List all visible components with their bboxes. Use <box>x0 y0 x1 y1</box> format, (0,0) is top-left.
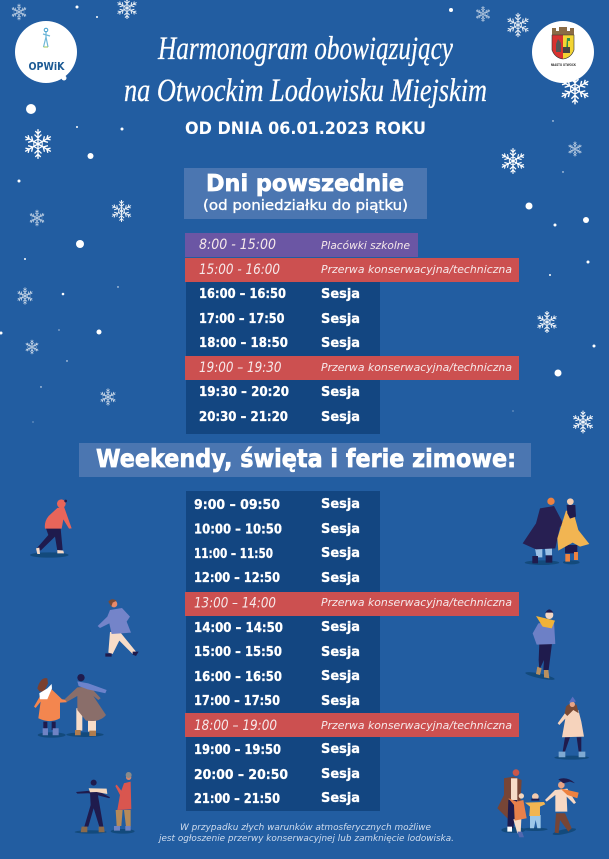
footnote <box>158 822 454 844</box>
row: session 11:00 <box>194 546 360 562</box>
logo: Miasto Otwock: MIASTO OTWOCK <box>551 62 576 67</box>
row: session 17:00: Sesja <box>321 312 360 327</box>
row: session 11:00: 11:00 – 11:50 <box>194 547 273 562</box>
row: session 19:00: Sesja <box>321 742 360 757</box>
couple holding hands <box>34 674 107 738</box>
row: session 11:00: Sesja <box>321 546 360 561</box>
footnote: jest ogłoszenie przerwy konserwacyjnej lub zamknięcie lodowiska. <box>158 834 454 844</box>
row: session 16:00 <box>194 669 360 685</box>
illustrations: right skaters <box>497 498 589 837</box>
skater in blue jacket <box>98 599 139 657</box>
row: session 16:00: 16:00 – 16:50 <box>194 670 282 685</box>
weekend schedule <box>185 491 519 811</box>
row: session 20:30 <box>199 410 360 425</box>
row: session 20:30: Sesja <box>321 410 360 425</box>
weekday schedule <box>185 233 519 434</box>
logo: Miasto Otwock <box>532 21 594 83</box>
heading: weekdays <box>184 168 427 219</box>
row: break 15:00 <box>185 258 519 282</box>
row: session 20:00 <box>194 767 360 783</box>
row: session 10:00: Sesja <box>321 522 360 537</box>
logo: OPWiK: OPWiK <box>28 61 65 73</box>
row: break 19:00: Przerwa konserwacyjna/techniczna <box>321 362 512 374</box>
row: break 18:00: 18:00 – 19:00 <box>194 718 277 734</box>
row: session 21:00: Sesja <box>321 791 360 806</box>
row: session 12:00: Sesja <box>321 571 360 586</box>
row: session 15:00 <box>194 645 360 660</box>
row: break 13:00: 13:00 – 14:00 <box>194 596 276 612</box>
row: session 18:00: 18:00 – 18:50 <box>199 336 288 351</box>
row: break 15:00: Przerwa konserwacyjna/techniczna <box>321 264 512 276</box>
row: break 18:00 <box>185 713 519 737</box>
row: school hours: Placówki szkolne <box>321 240 410 252</box>
heading: weekdays: Dni powszednie <box>206 169 404 197</box>
row: session 9:00: 9:00 – 09:50 <box>194 498 280 513</box>
skater in red hoodie <box>30 499 72 558</box>
row: session 16:00 <box>199 287 360 302</box>
row: session 9:00: Sesja <box>321 497 360 512</box>
row: school hours <box>185 233 418 257</box>
family of skaters <box>497 769 579 837</box>
row: session 17:00: Sesja <box>321 694 360 709</box>
row: break 18:00: Przerwa konserwacyjna/techniczna <box>321 720 512 732</box>
row: break 15:00: 15:00 - 16:00 <box>199 262 280 278</box>
panel: weekend sessions background <box>186 491 380 811</box>
skater with yellow scarf <box>525 609 555 681</box>
row: break 13:00: Przerwa konserwacyjna/techniczna <box>321 597 512 609</box>
row: session 19:30: Sesja <box>321 385 360 400</box>
row: session 14:00: Sesja <box>321 620 360 635</box>
row: session 17:00 <box>194 694 360 709</box>
row: session 19:00 <box>194 742 360 758</box>
title: Harmonogram obowiązujący <box>157 31 453 67</box>
row: session 16:00: 16:00 – 16:50 <box>199 287 286 302</box>
row: session 12:00: 12:00 – 12:50 <box>194 571 280 586</box>
row: session 17:00: 17:00 – 17:50 <box>194 694 280 709</box>
row: session 10:00: 10:00 – 10:50 <box>194 522 282 538</box>
row: break 19:00 <box>185 356 519 380</box>
row: session 15:00: 15:00 – 15:50 <box>194 645 282 660</box>
row: session 19:00: 19:00 – 19:50 <box>194 743 281 758</box>
row: session 14:00 <box>194 620 360 636</box>
row: session 9:00 <box>194 497 360 513</box>
title: na Otwockim Lodowisku Miejskim <box>124 73 487 109</box>
row: session 20:30: 20:30 – 21:20 <box>199 410 288 425</box>
row: session 18:00 <box>199 336 360 351</box>
subtitle: date: OD DNIA 06.01.2023 ROKU <box>185 119 426 138</box>
snow dots <box>0 6 596 422</box>
heading: weekends: Weekendy, święta i ferie zimowe: <box>96 444 516 473</box>
row: session 21:00 <box>194 791 360 807</box>
row: session 15:00: Sesja <box>321 645 360 660</box>
row: session 10:00 <box>194 522 360 538</box>
snowflakes <box>11 0 594 433</box>
panel: weekday sessions background <box>186 282 380 434</box>
row: session 18:00: Sesja <box>321 336 360 351</box>
row: session 19:30: 19:30 – 20:20 <box>199 385 289 400</box>
row: session 19:30 <box>199 385 360 400</box>
row: session 12:00 <box>194 571 360 586</box>
row: session 16:00: Sesja <box>321 287 360 302</box>
title <box>124 31 487 109</box>
couple in navy and yellow coats <box>523 498 589 565</box>
heading: weekdays: (od poniedziałku do piątku) <box>203 198 408 214</box>
row: session 21:00: 21:00 – 21:50 <box>194 792 280 807</box>
row: session 20:00: Sesja <box>321 767 360 782</box>
row: session 17:00: 17:00 – 17:50 <box>199 312 284 327</box>
skater in pink coat <box>554 697 589 760</box>
row: session 16:00: Sesja <box>321 669 360 684</box>
row: session 14:00: 14:00 – 14:50 <box>194 621 283 636</box>
row: break 13:00 <box>185 592 519 616</box>
row: session 20:00: 20:00 – 20:50 <box>194 768 288 783</box>
illustrations: left skaters <box>30 499 139 834</box>
footnote: W przypadku złych warunków atmosferycznych możliwe <box>180 822 431 833</box>
row: school hours: 8:00 - 15:00 <box>199 237 276 253</box>
two skaters <box>75 772 135 834</box>
row: break 19:00: 19:00 – 19:30 <box>199 360 282 376</box>
row: session 17:00 <box>199 312 360 327</box>
logo: OPWiK <box>15 21 77 83</box>
